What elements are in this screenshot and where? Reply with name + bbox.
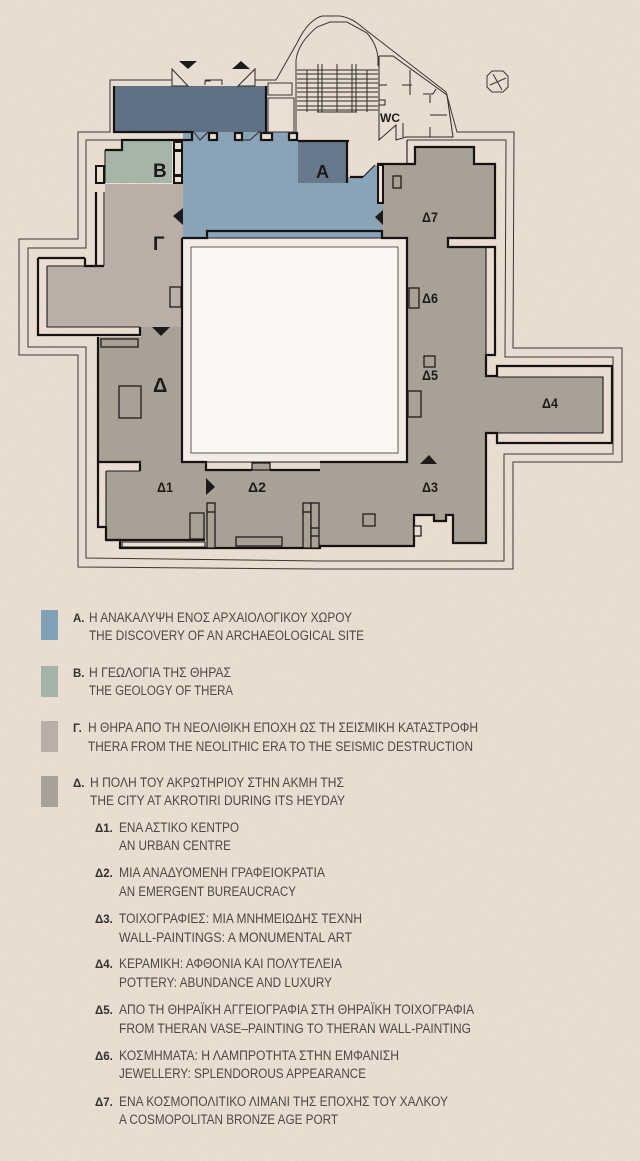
- floor plan: [19, 16, 622, 569]
- staircase: [297, 64, 378, 112]
- legend entry Γ: Γ.: [73, 723, 82, 735]
- legend entry A: [41, 610, 364, 643]
- room labels: Δ5: [422, 368, 438, 383]
- legend entry B: THE GEOLOGY OF THERA: [89, 683, 233, 698]
- route markers: [152, 61, 437, 495]
- room labels: Δ3: [422, 480, 438, 495]
- sub-entry Δ7: [95, 1094, 448, 1127]
- room Δ: city galleries: [98, 147, 603, 548]
- room labels: A: [316, 162, 329, 182]
- legend entry Δ: Η ΠΟΛΗ ΤΟΥ ΑΚΡΩΤΗΡΙΟΥ ΣΤΗΝ ΑΚΜΗ ΤΗΣ: [90, 775, 344, 790]
- room labels: Δ4: [542, 396, 558, 411]
- sub-entry Δ6: ΚΟΣΜΗΜΑΤΑ: Η ΛΑΜΠΡΟΤΗΤΑ ΣΤΗΝ ΕΜΦΑΝΙΣΗ: [119, 1048, 399, 1063]
- legend entry Γ: Η ΘΗΡΑ ΑΠΟ ΤΗ ΝΕΟΛΙΘΙΚΗ ΕΠΟΧΗ ΩΣ ΤΗ ΣΕΙΣΜΙΚΗ ΚΑΤΑΣΤΡΟΦΗ: [88, 720, 478, 735]
- WC label: WC: [380, 111, 400, 125]
- legend entry Γ: [41, 720, 478, 754]
- sub-entry Δ4: [95, 956, 342, 990]
- room A: dark section: [298, 142, 346, 183]
- room labels: Δ: [153, 375, 167, 397]
- sub-entry Δ5: [95, 1002, 474, 1036]
- sub-entry Δ2: AN EMERGENT BUREAUCRACY: [119, 884, 296, 899]
- colonnade: [209, 133, 297, 140]
- courtyard: [183, 238, 407, 462]
- sub-entry Δ6: JEWELLERY: SPLENDOROUS APPEARANCE: [119, 1066, 366, 1081]
- legend entry Δ: THE CITY AT AKROTIRI DURING ITS HEYDAY: [90, 793, 345, 808]
- perimeter outline: [19, 16, 622, 569]
- sub-entry Δ3: [95, 911, 362, 945]
- pillars and display cases: [101, 176, 435, 548]
- sub-entry Δ4: Δ4.: [95, 959, 113, 971]
- WC block: [379, 56, 453, 140]
- legend entry B: Β.: [73, 668, 84, 680]
- legend entry Δ: [41, 775, 345, 808]
- legend entry Γ: THERA FROM THE NEOLITHIC ERA TO THE SEISMIC DESTRUCTION: [88, 739, 473, 754]
- sub-entry Δ7: ΕΝΑ ΚΟΣΜΟΠΟΛΙΤΙΚΟ ΛΙΜΑΝΙ ΤΗΣ ΕΠΟΧΗΣ ΤΟΥ ΧΑΛΚΟΥ: [119, 1094, 448, 1109]
- sub-entry Δ3: ΤΟΙΧΟΓΡΑΦΙΕΣ: ΜΙΑ ΜΝΗΜΕΙΩΔΗΣ ΤΕΧΝΗ: [119, 911, 362, 926]
- sub-entry Δ1: [95, 820, 239, 853]
- room labels: Δ6: [422, 291, 438, 306]
- sub-entry Δ4: ΚΕΡΑΜΙΚΗ: ΑΦΘΟΝΙΑ ΚΑΙ ΠΟΛΥΤΕΛΕΙΑ: [119, 956, 342, 971]
- room labels: Δ7: [422, 210, 438, 225]
- entrance doors: [172, 69, 255, 86]
- colonnade zigzag: [193, 131, 260, 140]
- sub-entry Δ6: Δ6.: [95, 1051, 113, 1063]
- legend entry A: Α.: [73, 613, 84, 625]
- sub-entry Δ7: Δ7.: [95, 1097, 113, 1109]
- room A: blue hall: [183, 132, 382, 238]
- room labels: Δ2: [248, 480, 266, 495]
- sub-entry Δ1: AN URBAN CENTRE: [119, 838, 231, 853]
- legend entry A: THE DISCOVERY OF AN ARCHAEOLOGICAL SITE: [89, 628, 364, 643]
- sub-entry Δ5: FROM THERAN VASE–PAINTING TO THERAN WALL-PAINTING: [119, 1021, 471, 1036]
- room labels: Δ1: [157, 480, 173, 495]
- legend entry B: Η ΓΕΩΛΟΓΙΑ ΤΗΣ ΘΗΡΑΣ: [89, 665, 231, 680]
- pier beside room B: [96, 142, 383, 203]
- room: entrance hall: [114, 86, 266, 132]
- sub-entry Δ5: Δ5.: [95, 1005, 113, 1017]
- sub-entry Δ1: ΕΝΑ ΑΣΤΙΚΟ ΚΕΝΤΡΟ: [119, 820, 239, 835]
- sub-entry Δ1: Δ1.: [95, 823, 113, 835]
- legend entry A: Η ΑΝΑΚΑΛΥΨΗ ΕΝΟΣ ΑΡΧΑΙΟΛΟΓΙΚΟΥ ΧΩΡΟΥ: [89, 610, 352, 625]
- legend: [41, 610, 478, 1127]
- thin inner walls: [47, 140, 603, 547]
- sub-entry Δ3: WALL-PAINTINGS: A MONUMENTAL ART: [119, 930, 352, 945]
- legend entry Δ: Δ.: [73, 778, 84, 790]
- sub-entry Δ2: Δ2.: [95, 868, 113, 880]
- rooms beside the staircase: [268, 83, 294, 132]
- sub-entry Δ3: Δ3.: [95, 914, 113, 926]
- sub-entry Δ5: ΑΠΟ ΤΗ ΘΗΡΑΪΚΗ ΑΓΓΕΙΟΓΡΑΦΙΑ ΣΤΗ ΘΗΡΑΪΚΗ ΤΟΙΧΟΓΡΑΦΙΑ: [119, 1002, 474, 1017]
- sub-entry Δ2: ΜΙΑ ΑΝΑΔΥΟΜΕΝΗ ΓΡΑΦΕΙΟΚΡΑΤΙΑ: [119, 865, 325, 880]
- room labels: Γ: [153, 234, 165, 255]
- sub-entry Δ7: A COSMOPOLITAN BRONZE AGE PORT: [119, 1112, 338, 1127]
- legend entry B: [41, 665, 233, 698]
- north compass: [487, 71, 508, 92]
- sub-entry Δ6: [95, 1048, 399, 1081]
- room B: geology: [105, 141, 172, 183]
- thick walls: [38, 86, 612, 548]
- room Γ: [47, 184, 183, 327]
- sub-entry Δ4: POTTERY: ABUNDANCE AND LUXURY: [119, 975, 332, 990]
- room labels: [153, 161, 558, 495]
- sub-entry Δ2: [95, 865, 325, 899]
- room labels: B: [153, 161, 167, 182]
